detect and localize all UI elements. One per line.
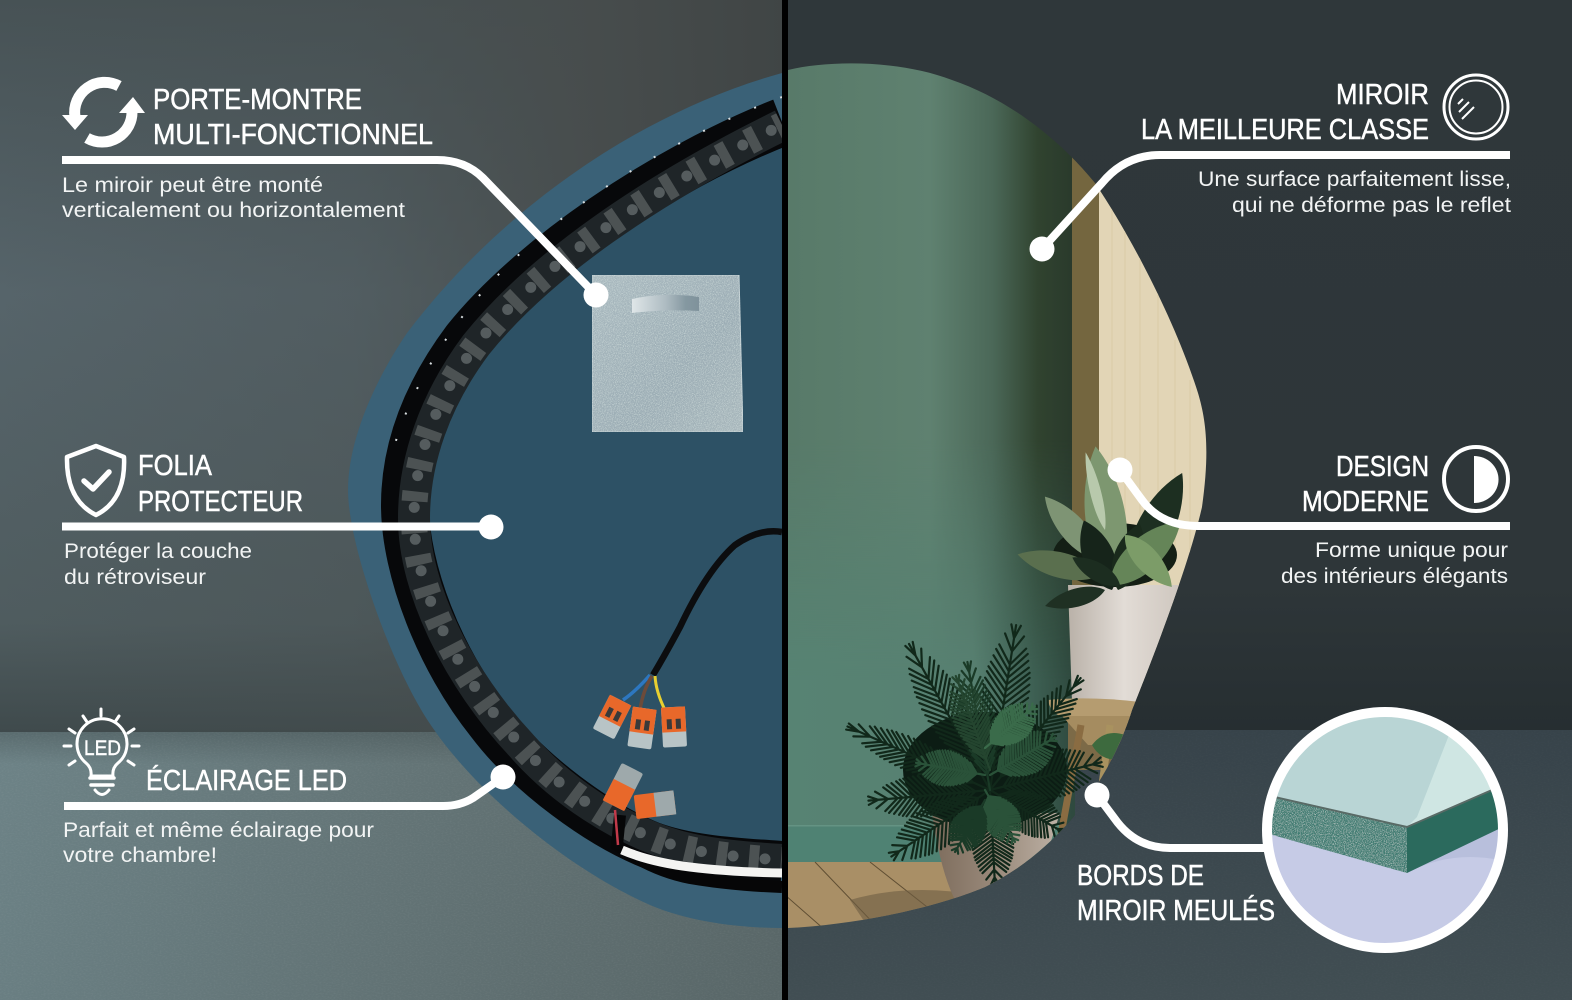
icon: shield [67,446,124,515]
callout: eclairage LED: votre chambre! [63,844,217,867]
leader line [62,514,504,540]
power cable [623,531,782,710]
heading: BORDS DE [1077,860,1204,892]
heading: ÉCLAIRAGE LED [146,764,347,797]
leader line [64,764,516,806]
description: Une surface parfaitement lisse, [1198,168,1511,191]
callout: bords de miroir meules [1077,700,1510,955]
callout: folia protecteur: PROTECTEUR [138,486,303,518]
palm plant [841,621,1107,886]
left background wall [0,0,785,1000]
callout: design moderne: des intérieurs élégants [1281,565,1508,588]
callout: miroir la meilleure classe: qui ne déforme pas le reflet [1232,194,1511,217]
description: Protéger la couche [64,540,252,563]
white plant pot on stool [1048,585,1180,840]
heading: PORTE-MONTRE [153,84,362,116]
panel: mirror back side [348,73,782,928]
callout: eclairage LED [63,709,516,867]
leader line [62,160,608,308]
icon: round mirror [1444,75,1508,139]
callout: porte-montre [62,82,608,308]
callout: folia protecteur: du rétroviseur [64,566,206,589]
icon: half circle [1444,447,1508,511]
leader line [1030,155,1510,262]
description: Le miroir peut être monté [62,174,323,197]
callout: miroir la meilleure classe [1030,75,1511,262]
heading: DESIGN [1336,451,1429,483]
wooden floor [788,862,1026,928]
leader line [1084,782,1265,848]
icon: rotating arrows [62,82,145,142]
callout: miroir la meilleure classe: LA MEILLEURE CLASSE [1141,114,1429,146]
icon: LED bulb [64,709,139,794]
callout: design moderne [1108,447,1510,588]
description: Forme unique pour [1315,539,1508,562]
leader line [1108,458,1510,526]
hanging hook [632,295,699,313]
large leaf plant [1018,446,1184,608]
wire connectors [593,695,687,819]
LED strip channel [390,97,782,865]
magnified glass edge lens [1260,700,1510,955]
callout: bords de miroir meules: MIROIR MEULÉS [1077,894,1275,927]
mirror back plate [348,73,782,928]
heading: MIROIR [1336,79,1429,111]
callout: porte-montre: verticalement ou horizontalement [62,199,405,222]
wall hanging plate [592,275,743,432]
wood pillar [1068,158,1206,770]
inner back surface [405,122,782,865]
white LED cable [615,810,782,887]
description: Parfait et même éclairage pour [63,819,374,842]
heading: FOLIA [138,450,213,482]
icon: LED bulb: LED [84,737,121,760]
callout: design moderne: MODERNE [1302,486,1429,518]
callout: porte-montre: MULTI-FONCTIONNEL [153,119,433,151]
callout: folia protecteur [62,446,504,589]
green wall [785,50,1075,870]
panel: mirror front photo [785,50,1219,932]
palm pot [932,813,1060,900]
right background wall [785,0,1572,1000]
center divider [782,0,788,1000]
